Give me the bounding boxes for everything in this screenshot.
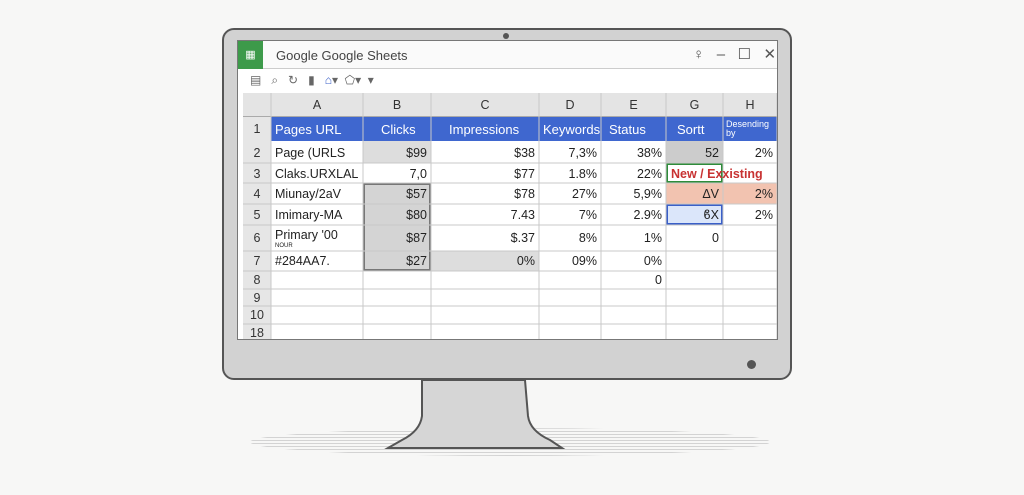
grid: 7 <box>254 254 260 268</box>
grid: G <box>690 98 699 112</box>
grid: 1% <box>644 231 662 245</box>
grid: 4 <box>254 187 260 201</box>
icon: sheets <box>238 41 263 69</box>
screen <box>237 40 778 340</box>
grid: A <box>313 98 321 112</box>
grid: C <box>480 98 490 112</box>
grid: 7,3% <box>568 146 597 160</box>
monitor stand <box>384 380 566 449</box>
header row (blue): Impressions <box>449 122 519 137</box>
icon: sheets: ▦ <box>245 49 256 61</box>
grid: $78 <box>514 187 535 201</box>
header row (blue): Keywords <box>543 122 600 137</box>
grid: $80 <box>406 208 427 222</box>
header row (blue) <box>271 117 777 141</box>
grid: 0% <box>517 254 535 268</box>
camera dot <box>503 33 509 39</box>
grid: $77 <box>514 167 535 181</box>
grid: 6 <box>254 231 260 245</box>
app title: Google Google Sheets <box>276 48 408 63</box>
floor shadow <box>250 428 770 456</box>
grid: 1.8% <box>568 167 597 181</box>
grid: 2.9% <box>634 208 662 222</box>
grid: 2% <box>755 187 773 201</box>
grid: 22% <box>637 167 662 181</box>
header row (blue): Sortt <box>677 122 704 137</box>
grid: $87 <box>406 231 427 245</box>
column headers <box>243 93 779 117</box>
grid: #284AA7. <box>275 254 330 268</box>
grid: D <box>565 98 575 112</box>
grid: ϐX <box>703 208 719 222</box>
grid: 27% <box>572 187 597 201</box>
grid: $.37 <box>511 231 535 245</box>
grid: 0% <box>644 254 662 268</box>
grid: Primary '00 <box>275 228 338 242</box>
grid: NOUR <box>275 243 293 249</box>
grid: 52 <box>705 146 719 160</box>
header row (blue): Status <box>609 122 646 137</box>
grid: 5 <box>254 208 260 222</box>
grid: 38% <box>637 146 662 160</box>
grid: $99 <box>406 146 427 160</box>
grid: Miunay/2aV <box>275 187 341 201</box>
grid: B <box>393 98 401 112</box>
grid: $27 <box>406 254 427 268</box>
shaded cells <box>363 141 431 163</box>
grid: Claks.URXLAL <box>275 167 358 181</box>
toolbar: ▤ ⌕ ↻ ▮ ⌂▾ ⬠▾ ▾ <box>250 73 374 87</box>
grid: 8% <box>579 231 597 245</box>
grid: 7,0 <box>410 167 427 181</box>
grid: 10 <box>250 308 264 322</box>
row numbers: 1 <box>254 122 260 136</box>
grid: 0 <box>655 273 662 287</box>
grid: 09% <box>572 254 597 268</box>
grid: 2 <box>254 146 260 160</box>
row number column <box>243 117 271 341</box>
header row (blue): by <box>726 128 736 138</box>
grid: 3 <box>254 167 260 181</box>
grid: H <box>745 98 755 112</box>
grid: ΔV <box>702 187 719 201</box>
monitor <box>222 28 792 380</box>
header row (blue): Clicks <box>381 122 416 137</box>
grid: 7% <box>579 208 597 222</box>
grid <box>243 93 777 340</box>
power button <box>747 360 756 369</box>
grid: 0 <box>712 231 719 245</box>
grid: 5,9% <box>634 187 662 201</box>
grid: Imimary-MA <box>275 208 342 222</box>
grid: 18 <box>250 326 264 340</box>
grid: $57 <box>406 187 427 201</box>
grid: 8 <box>254 273 260 287</box>
grid: E <box>629 98 638 112</box>
grid: 7.43 <box>511 208 535 222</box>
grid lines <box>243 93 777 339</box>
window controls: ♀ – ☐ ✕ <box>693 46 776 63</box>
grid: 2% <box>755 208 773 222</box>
data rows: Page (URLS <box>275 146 345 160</box>
grid: New / Exxisting <box>671 167 763 181</box>
title bar <box>238 41 779 69</box>
header row (blue): Desending <box>726 119 769 129</box>
grid: 9 <box>254 291 260 305</box>
header row (blue): Pages URL <box>275 122 341 137</box>
grid: $38 <box>514 146 535 160</box>
grid: 2% <box>755 146 773 160</box>
